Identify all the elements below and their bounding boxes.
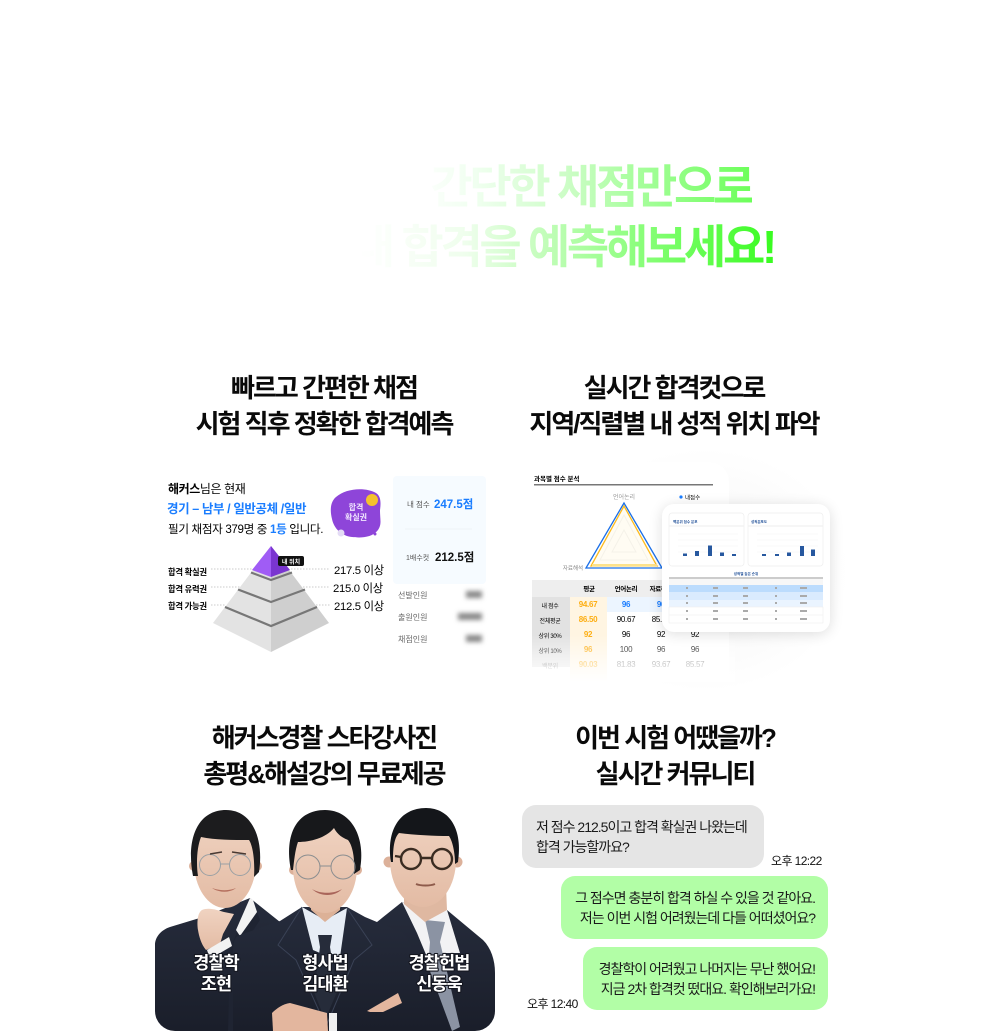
table: subject scores: 94.67 <box>579 600 598 609</box>
table: subject scores: 상위 10% <box>539 647 562 655</box>
panel: score summary: 출원인원 <box>398 612 427 622</box>
table: subject scores: 92 <box>657 630 666 639</box>
table: subject scores: 85.57 <box>686 660 705 669</box>
panel: score summary: 선발인원 <box>398 590 427 600</box>
table: subject scores: 상위 30% <box>539 632 562 640</box>
table: subject scores: 평균 <box>583 584 595 593</box>
heading: real-time cut: 실시간 합격컷으로 <box>584 373 764 403</box>
icon: pass badge <box>331 489 381 537</box>
panel: score summary: 채점인원 <box>398 634 427 644</box>
table: subject scores: 90.67 <box>617 615 636 624</box>
panel: score summary: 212.5점 <box>435 551 474 564</box>
panel: score summary: 1배수컷 <box>406 553 429 562</box>
heading: real-time cut <box>529 373 820 439</box>
panel: score summary: 247.5점 <box>434 498 473 511</box>
panel: detail card: 성적별 높은 순위 <box>734 571 758 576</box>
panel: subject score card: 과목별 점수 분석 <box>534 474 579 483</box>
table: subject scores <box>532 580 713 681</box>
table: rank rows <box>669 577 823 623</box>
table: subject scores: 90.03 <box>579 660 598 669</box>
chart: bars <box>683 546 815 556</box>
labels: instructor names: 형사법 <box>302 953 348 973</box>
heading: community: 이번 시험 어땠을까? <box>575 723 775 753</box>
chat bubble: answer two: 경찰학이 어려웠고 나머지는 무난 했어요! <box>599 961 815 977</box>
table: subject scores: 96 <box>691 645 700 654</box>
chat bubble: question <box>522 805 764 868</box>
table: subject scores: 전체평균 <box>540 617 561 625</box>
table: subject scores: 내 점수 <box>541 602 559 610</box>
panel: detail card: 성적분포도 <box>751 519 768 524</box>
chart: pass pyramid: 내 위치 <box>282 558 300 566</box>
chart: pass pyramid: 215.0 이상 <box>333 582 383 595</box>
table: subject scores: 81.83 <box>617 660 636 669</box>
table: subject scores: 100 <box>620 645 633 654</box>
heading: fast scoring <box>196 373 454 439</box>
chart: pass pyramid: 212.5 이상 <box>334 600 384 613</box>
text block: user result: 해커스님은 현재 <box>168 482 245 496</box>
icon: pass badge: 합격 <box>349 502 363 512</box>
photo: three instructors <box>155 808 495 1031</box>
chart: radar: 자료해석 <box>563 564 583 572</box>
chart: pass pyramid: 합격 가능권 <box>168 601 207 611</box>
table: subject scores: 93.67 <box>652 660 671 669</box>
chat bubble: answer one: 저는 이번 시험 어려웠는데 다들 어떠셨어요? <box>580 910 815 926</box>
panel: analysis graphic <box>525 448 850 692</box>
chat bubble: answer one: 그 점수면 충분히 합격 하실 수 있을 것 같아요. <box>575 890 815 906</box>
table: subject scores: 언어논리 <box>615 584 638 593</box>
table: subject scores: 86.50 <box>579 615 598 624</box>
labels: instructor names: 김대환 <box>302 974 349 994</box>
chart: radar <box>563 493 700 572</box>
chat bubble: question: 합격 가능할까요? <box>536 839 629 855</box>
table: subject scores: 자료해석 <box>650 584 673 593</box>
headline: gradient fade-in text <box>353 161 774 273</box>
panel: score summary <box>393 476 486 644</box>
labels: instructor names: 신동욱 <box>416 974 463 994</box>
table: subject scores: 96 <box>657 600 666 609</box>
heading: real-time cut: 지역/직렬별 내 성적 위치 파악 <box>529 409 819 439</box>
table: subject scores: 92 <box>691 630 700 639</box>
figure: 김대환 <box>240 810 402 1031</box>
labels: instructor names: 조현 <box>201 974 231 994</box>
chat bubble: answer one <box>561 876 828 939</box>
chat bubble: answer two <box>583 947 828 1010</box>
timestamp: 오후 12:22 <box>771 854 822 868</box>
headline: gradient fade-in text: 간단한 채점만으로 <box>430 161 752 213</box>
panel: subject score card <box>525 462 735 682</box>
figure: 신동욱 <box>370 808 495 1031</box>
heading: community: 실시간 커뮤니티 <box>596 759 754 789</box>
heading: free lectures <box>203 723 446 789</box>
panel: scoring result <box>155 476 836 1031</box>
chart: radar: 언어논리 <box>613 493 635 501</box>
labels: instructor names: 경찰헌법 <box>409 953 469 973</box>
chart: pass pyramid <box>168 546 384 652</box>
text block: user result: 경기 – 남부 / 일반공체 /일반 <box>167 501 307 516</box>
chat bubble: question: 저 점수 212.5이고 합격 확실권 나왔는데 <box>536 819 747 835</box>
text block: user result: 필기 채점자 379명 중 1등 입니다. <box>168 523 323 536</box>
table: subject scores: 85.17 <box>652 615 671 624</box>
chart: pass pyramid: 합격 확실권 <box>168 567 207 577</box>
figure: 조현 <box>155 810 290 1031</box>
heading: community <box>575 723 776 789</box>
chart: radar: 내점수 <box>685 494 700 502</box>
table: subject scores: 96 <box>657 645 666 654</box>
labels: instructor names: 경찰학 <box>193 953 240 973</box>
labels: instructor names <box>193 953 469 994</box>
heading: fast scoring: 시험 직후 정확한 합격예측 <box>196 409 452 439</box>
chat bubble: answer two: 지금 2차 합격컷 떴대요. 확인해보러가요! <box>601 981 815 997</box>
panel: score summary: 내 점수 <box>407 499 430 509</box>
chart: pass pyramid: 217.5 이상 <box>334 564 384 577</box>
panel: detail card <box>662 504 830 634</box>
panel: detail card: 백분위 점수 분포 <box>673 519 698 524</box>
timestamp: 오후 12:40 <box>527 997 578 1011</box>
table: subject scores: 96 <box>622 600 631 609</box>
icon: pass badge: 확실권 <box>345 512 367 522</box>
table: subject scores: 92 <box>584 630 593 639</box>
table: subject scores: 96 <box>584 645 593 654</box>
heading: free lectures: 해커스경찰 스타강사진 <box>212 723 436 753</box>
heading: fast scoring: 빠르고 간편한 채점 <box>231 373 417 403</box>
heading: free lectures: 총평&해설강의 무료제공 <box>203 759 445 789</box>
headline: gradient fade-in text: 내 합격을 예측해보세요! <box>353 221 774 273</box>
chart: pass pyramid: 합격 유력권 <box>168 584 207 594</box>
table: subject scores: 96 <box>622 630 631 639</box>
table: subject scores: 백분위 <box>542 662 558 670</box>
text block: user result <box>167 482 323 536</box>
